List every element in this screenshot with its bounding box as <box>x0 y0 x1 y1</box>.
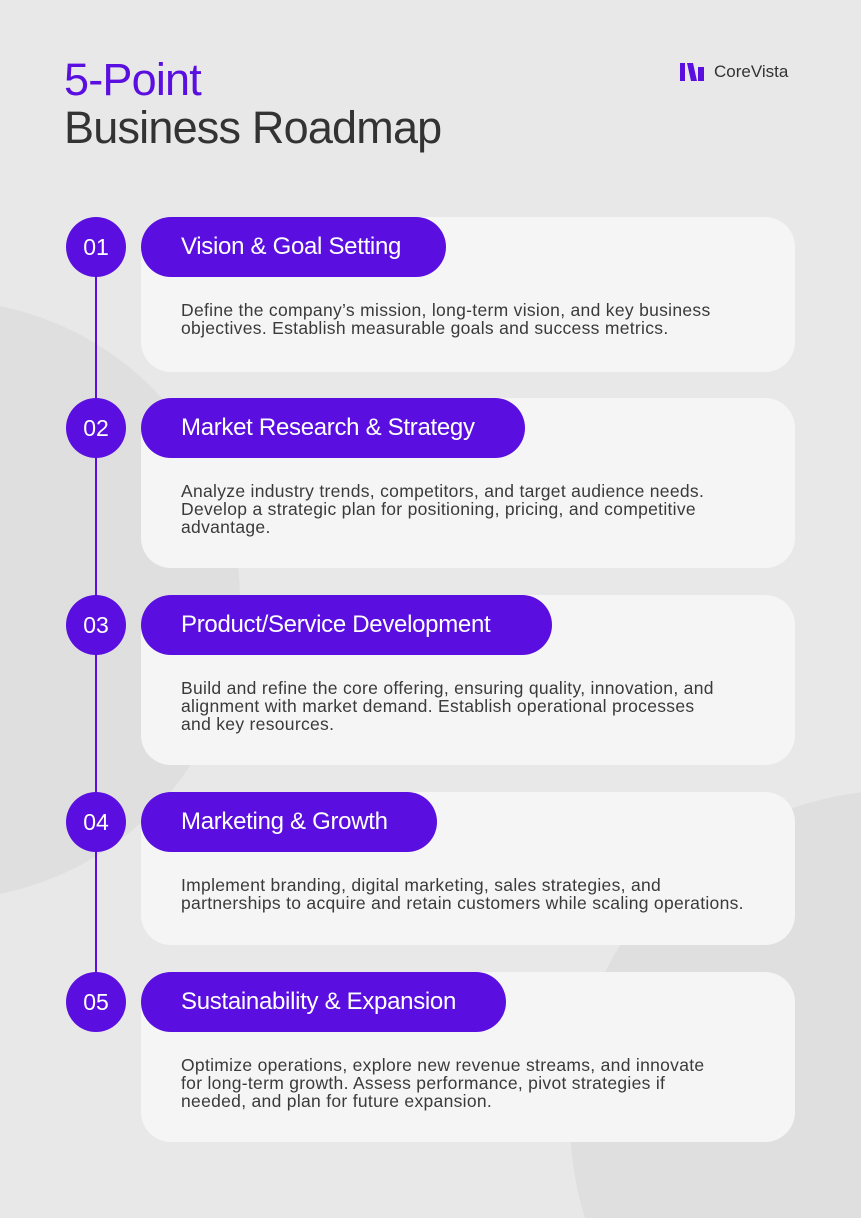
step 1: Vision & Goal Setting <box>181 233 401 260</box>
step 4 <box>141 792 795 945</box>
number 5: 05 <box>83 989 109 1015</box>
timeline line <box>95 247 97 1002</box>
step 5 <box>141 972 795 1142</box>
step 3: Product/Service Development <box>181 611 490 638</box>
step 1 <box>141 217 795 372</box>
step 3: Build and refine the core offering, ensuring quality, innovation, and <box>181 678 714 698</box>
step 1: Define the company’s mission, long-term vision, and key business <box>181 300 711 320</box>
logo: CoreVista <box>714 62 788 81</box>
number 1: 01 <box>83 234 109 260</box>
step 4: Marketing & Growth <box>181 808 388 835</box>
number 2 <box>66 398 126 458</box>
title: Business Roadmap <box>64 102 441 153</box>
step 2: advantage. <box>181 517 271 537</box>
step 3: and key resources. <box>181 714 334 734</box>
step 2: Market Research & Strategy <box>181 414 475 441</box>
number 3 <box>66 595 126 655</box>
number 3: 03 <box>83 612 109 638</box>
logo <box>680 62 788 81</box>
title: 5-Point <box>64 54 201 105</box>
step 3 <box>141 595 795 765</box>
step 5: for long-term growth. Assess performance, pivot strategies if <box>181 1073 665 1093</box>
step 2 <box>141 398 795 568</box>
step 2: Develop a strategic plan for positioning, pricing, and competitive <box>181 499 696 519</box>
number 1 <box>66 217 126 277</box>
step 4: partnerships to acquire and retain customers while scaling operations. <box>181 893 744 913</box>
icon: logo mark <box>680 63 704 81</box>
number 4: 04 <box>83 809 109 835</box>
number 2: 02 <box>83 415 109 441</box>
step 1: objectives. Establish measurable goals and success metrics. <box>181 318 668 338</box>
title <box>64 54 441 153</box>
step 5: Optimize operations, explore new revenue streams, and innovate <box>181 1055 704 1075</box>
step 3: alignment with market demand. Establish operational processes <box>181 696 694 716</box>
step 5: Sustainability & Expansion <box>181 988 456 1015</box>
step 5: needed, and plan for future expansion. <box>181 1091 492 1111</box>
step 4: Implement branding, digital marketing, sales strategies, and <box>181 875 661 895</box>
number 4 <box>66 792 126 852</box>
number 5 <box>66 972 126 1032</box>
step 2: Analyze industry trends, competitors, and target audience needs. <box>181 481 704 501</box>
